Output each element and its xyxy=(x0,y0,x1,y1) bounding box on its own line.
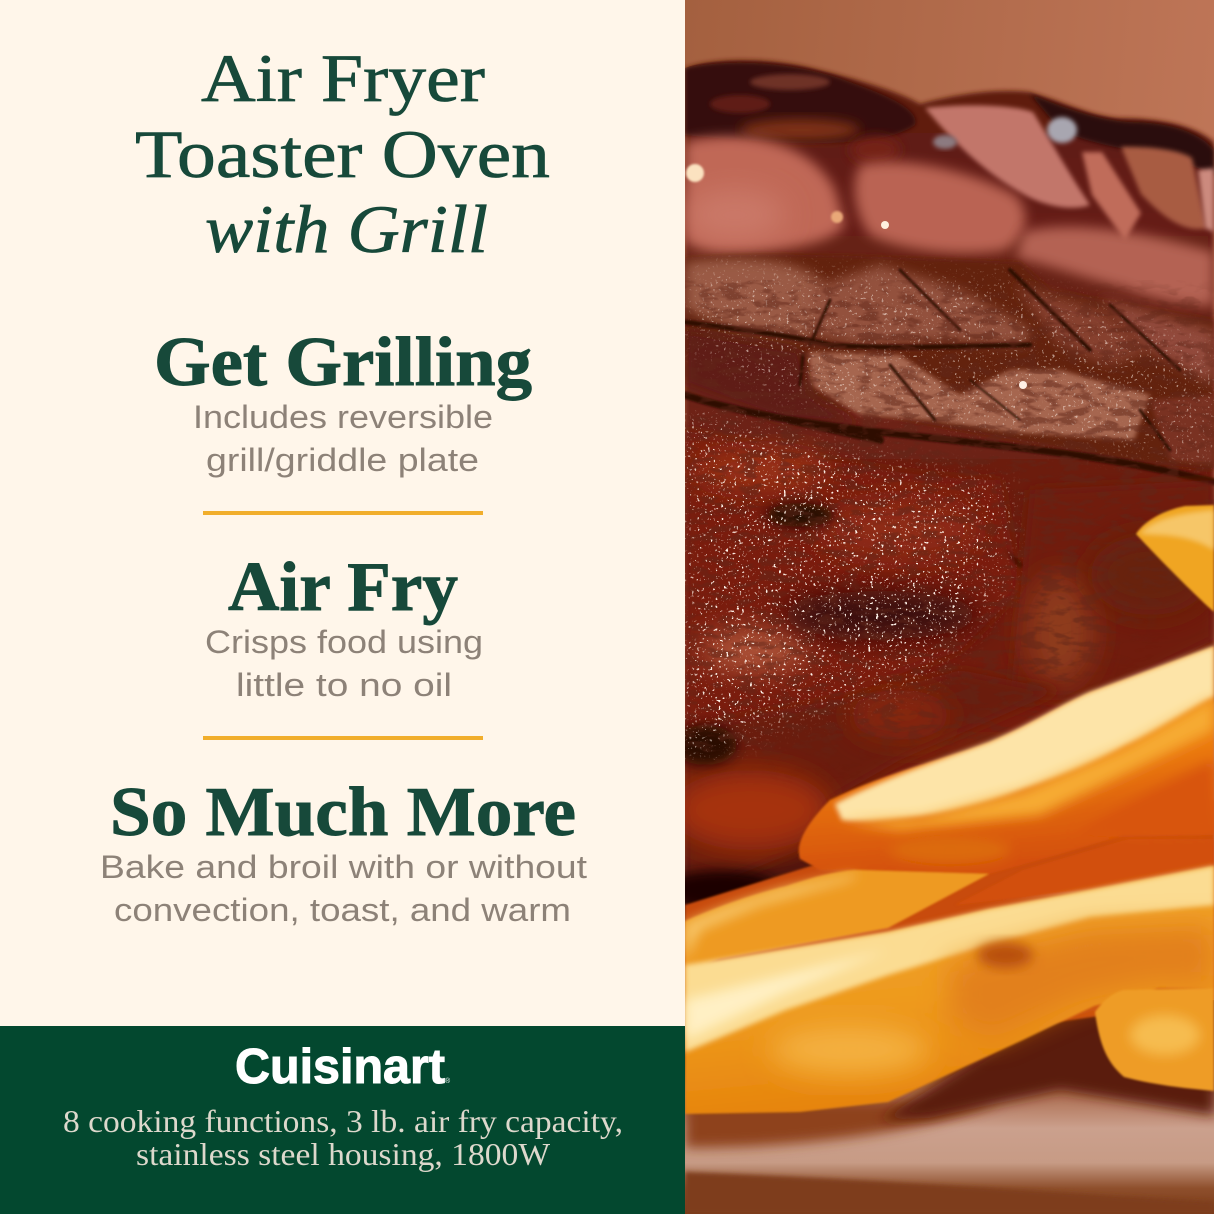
text: get grilling description: grill/griddle plate xyxy=(206,442,479,478)
text: so much more description xyxy=(100,849,587,928)
feature: air fry xyxy=(205,549,483,703)
heading: get grilling: Get Grilling xyxy=(154,324,532,401)
glazed crust xyxy=(685,430,1021,728)
text: so much more description: convection, toast, and warm xyxy=(114,892,571,928)
text: product specs: stainless steel housing, 1800W xyxy=(136,1136,551,1172)
title: with Grill xyxy=(205,191,488,267)
heading: air fry: Air Fry xyxy=(228,549,458,626)
text: get grilling description xyxy=(193,399,493,478)
fry: small top right xyxy=(1136,505,1214,612)
panel: green brand footer xyxy=(0,1026,685,1214)
text: product specs xyxy=(63,1103,623,1172)
text: get grilling description: Includes reversible xyxy=(193,399,493,435)
dark seams xyxy=(685,267,1214,568)
fry: large upper xyxy=(799,646,1214,874)
french fries xyxy=(685,505,1214,1114)
feature: get grilling xyxy=(154,324,532,478)
logo: Cuisinart: ® xyxy=(445,1077,451,1085)
dark crust xyxy=(685,63,916,143)
panel: cream text column xyxy=(0,0,685,1026)
logo: Cuisinart: Cuisinart xyxy=(235,1040,445,1094)
pink slices xyxy=(685,137,845,252)
feature: so much more xyxy=(100,774,587,928)
plate shadow xyxy=(882,1016,1214,1128)
text: so much more description: Bake and broil with or without xyxy=(100,849,587,885)
text: air fry description: little to no oil xyxy=(236,667,452,703)
text: air fry description: Crisps food using xyxy=(205,624,483,660)
title: Toaster Oven xyxy=(135,116,550,192)
text: product specs: 8 cooking functions, 3 lb. air fry capacity, xyxy=(63,1103,623,1139)
fry: large lower xyxy=(685,866,1214,1114)
tan seared band xyxy=(685,255,1214,470)
fry: back dark orange xyxy=(955,839,1214,905)
photo: grilled steak and fries xyxy=(660,0,1214,1214)
fry: lower right xyxy=(1095,988,1214,1091)
fry: middle left xyxy=(685,870,989,971)
heading: so much more: So Much More xyxy=(110,774,576,851)
title xyxy=(135,40,550,267)
text: air fry description xyxy=(205,624,483,703)
steak xyxy=(660,60,1214,930)
underlay: between fries xyxy=(685,800,1214,1050)
title: Air Fryer xyxy=(201,40,485,116)
